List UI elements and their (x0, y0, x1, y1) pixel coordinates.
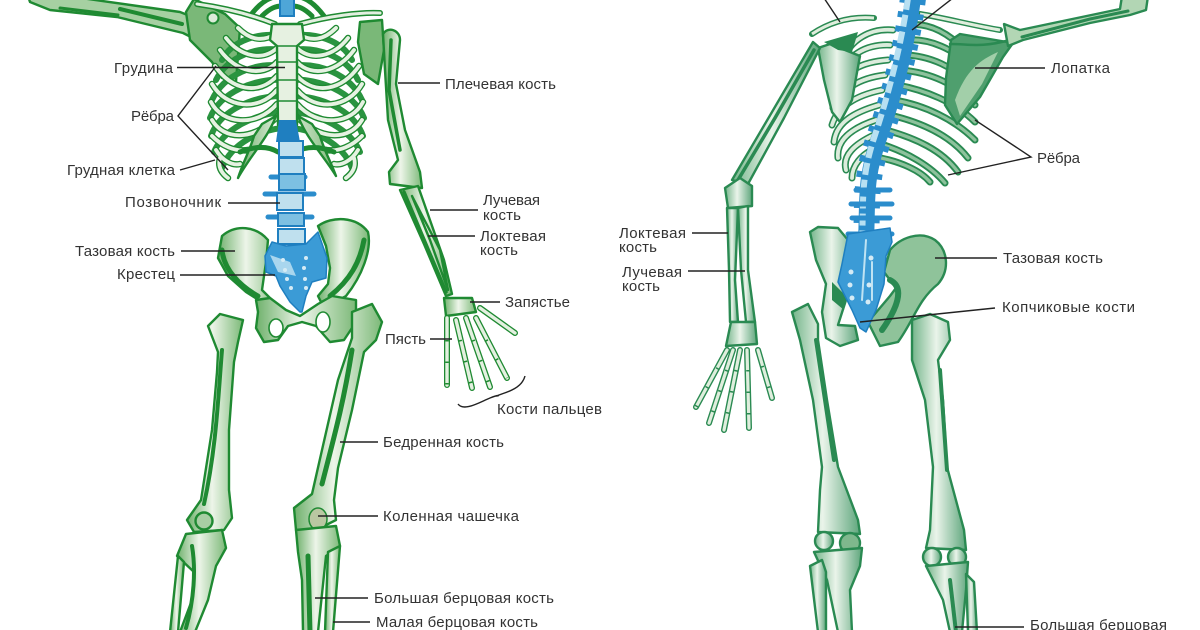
neck vertebrae and upper ribs (250, 0, 324, 16)
right hand (444, 298, 515, 388)
rear sacrum (838, 228, 892, 332)
labels: front view: Позвоночник (125, 194, 221, 211)
rear skeleton (696, 0, 1148, 630)
left raised arm bone (28, 0, 200, 40)
labels: front view: кость (480, 242, 518, 259)
labels: front view: Бедренная кость (383, 434, 504, 451)
labels: rear view: Лопатка (1051, 60, 1111, 77)
labels: rear view: Рёбра (1037, 150, 1081, 167)
right scapula (358, 20, 384, 84)
labels: front view: Тазовая кость (75, 243, 175, 260)
rear iliac right (868, 235, 946, 346)
labels: front view: Пясть (385, 331, 426, 348)
labels: front view: кость (483, 207, 521, 224)
labels: front view: Локтевая (480, 228, 546, 245)
rear ribs (832, 25, 975, 183)
rear left arm (725, 42, 820, 322)
tibia and fibula right (296, 526, 340, 630)
rib cage (210, 28, 364, 178)
labels: rear view: Копчиковые кости (1002, 299, 1135, 316)
left scapula (186, 0, 240, 82)
labels: front view: Лучевая (483, 192, 540, 209)
left scapula (818, 32, 860, 122)
leader lines (177, 0, 1045, 627)
right arm (383, 30, 452, 296)
rear upper arm right (1004, 0, 1148, 46)
lumbar spine (265, 120, 314, 244)
right scapula lopatka (945, 34, 1013, 124)
labels: front view: Большая берцовая кость (374, 590, 554, 607)
labels: front view: Кости пальцев (497, 401, 602, 418)
labels: rear view: Тазовая кость (1003, 250, 1103, 267)
rear femur left (792, 304, 860, 553)
labels: front view: Плечевая кость (445, 76, 556, 93)
sternum (270, 24, 304, 125)
rear tibia and fibula left (810, 548, 862, 630)
front skeleton (28, 0, 515, 630)
rear tibia and fibula right (926, 562, 977, 630)
tibia and fibula left (170, 530, 226, 630)
labels: front view: Грудная клетка (67, 162, 176, 179)
labels: front view (67, 60, 602, 630)
lower pelvis (256, 296, 356, 342)
labels: rear view: кость (622, 278, 660, 295)
labels: rear view: кость (619, 239, 657, 256)
rear spine (848, 0, 913, 240)
rear iliac left (810, 227, 858, 346)
labels: front view: Крестец (117, 266, 175, 283)
labels: front view: Рёбра (131, 108, 175, 125)
clavicles (197, 4, 380, 24)
rear femur right (912, 314, 966, 566)
labels: rear view (619, 60, 1167, 630)
labels: front view: Коленная чашечка (383, 508, 520, 525)
sacrum (265, 232, 327, 312)
rear left hand (696, 322, 772, 430)
labels: front view: Запястье (505, 294, 570, 311)
iliac bones (218, 219, 369, 308)
labels: rear view: Локтевая (619, 225, 686, 242)
labels: front view: Грудина (114, 60, 174, 77)
femur right (294, 304, 382, 530)
rear clavicle and acromion (812, 14, 1000, 34)
labels: rear view: Лучевая (622, 264, 682, 281)
femur left (187, 314, 243, 532)
patella (309, 508, 327, 530)
